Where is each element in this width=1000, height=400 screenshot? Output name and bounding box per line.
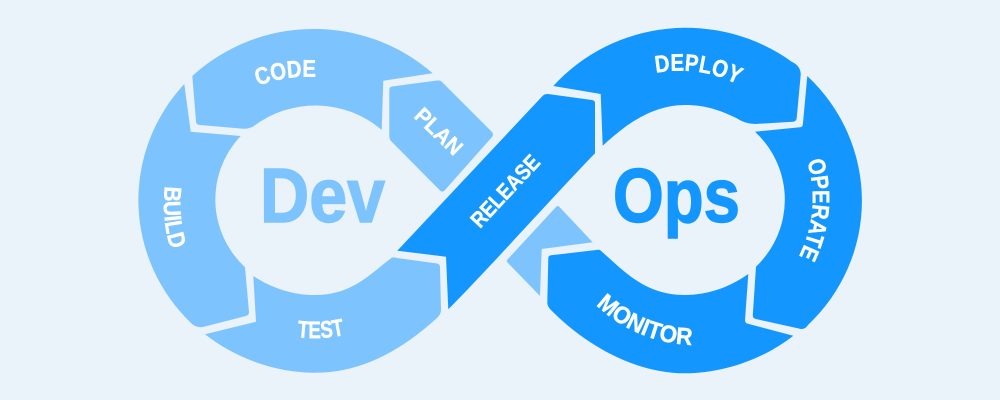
label: PLAN: PLAN (410, 103, 468, 160)
segment: release (397, 94, 595, 309)
segment: monitor (547, 250, 794, 374)
segment: code (192, 28, 432, 130)
heading: Ops: Ops (613, 154, 740, 239)
segment: operate (752, 76, 862, 329)
segment: deploy (553, 28, 801, 146)
segment: test (205, 257, 441, 373)
label: MONITOR: MONITOR (596, 293, 692, 346)
label: TEST: TEST (298, 318, 342, 338)
label: OPERATE: OPERATE (799, 159, 830, 262)
heading: Dev: Dev (260, 153, 385, 239)
label: BUILD: BUILD (164, 187, 185, 247)
arrow head: loop return (507, 206, 593, 296)
segment: plan (389, 80, 493, 192)
segment: build (138, 84, 249, 328)
label: DEPLOY: DEPLOY (654, 54, 744, 82)
label: CODE: CODE (255, 60, 316, 84)
label: RELEASE: RELEASE (465, 150, 545, 232)
